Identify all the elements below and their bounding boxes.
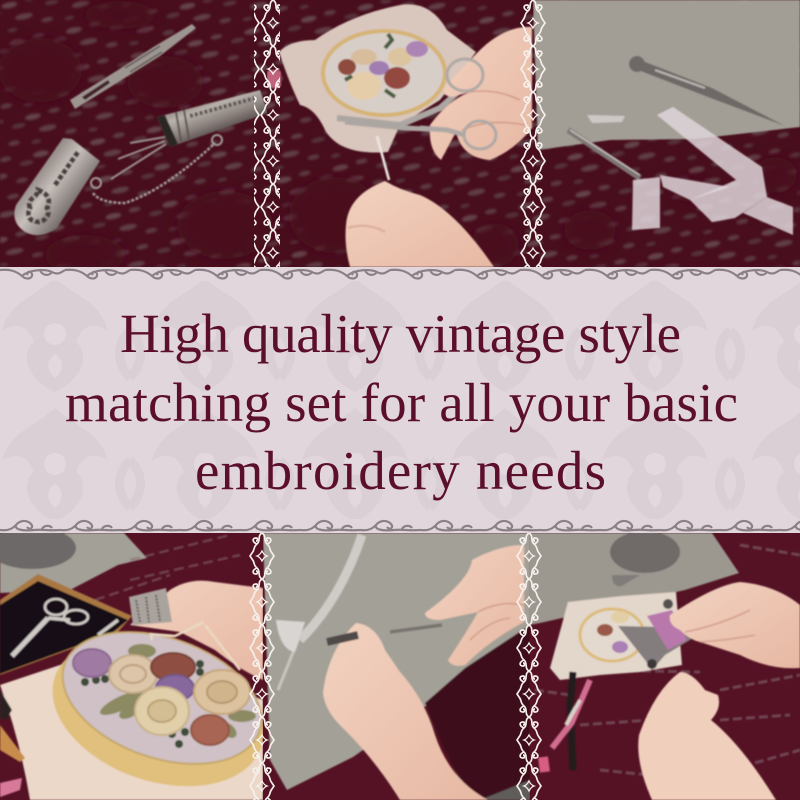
photo: hand holding awl bbox=[263, 533, 530, 800]
lace divider: top right bbox=[520, 0, 546, 267]
photo: stitching hoop with thimble bbox=[0, 527, 284, 800]
icon: silver floss card bbox=[618, 599, 702, 670]
icon: right hand bbox=[430, 27, 532, 160]
icon: organza ribbon strand bbox=[276, 535, 362, 690]
banner panel bbox=[0, 267, 800, 533]
photo: awl and ribbon on cloth bbox=[533, 0, 800, 235]
icon: upper hand bbox=[670, 582, 800, 668]
icon: dark green knots bbox=[81, 660, 204, 748]
icon: upper finger lines bbox=[685, 610, 755, 642]
photo: winding floss on card bbox=[529, 531, 800, 800]
headline line 2: matching set for all your basic bbox=[65, 372, 738, 433]
icon: large embroidery hoop bbox=[52, 621, 263, 787]
icon: needle tube bbox=[157, 90, 268, 147]
icon: cream fabric bbox=[0, 664, 263, 800]
icon: grey corner bbox=[480, 780, 530, 800]
lace divider: top left bbox=[254, 0, 280, 267]
icon: pink tag bbox=[267, 70, 281, 88]
icon: wooden scissor box bbox=[0, 574, 132, 675]
icon: finger lines bbox=[462, 91, 525, 130]
icon: grey cloth bbox=[263, 533, 530, 790]
headline line 1: High quality vintage style bbox=[120, 303, 681, 364]
icon: hand with thimble bbox=[129, 581, 263, 680]
icon: leaves bbox=[97, 644, 256, 741]
icon: thread bbox=[151, 622, 240, 670]
icon: supporting hand bbox=[425, 545, 524, 666]
icon: awl on linen bbox=[629, 56, 785, 126]
icon: grey yarn and cloth bbox=[0, 527, 147, 593]
icon: lower hand bbox=[638, 672, 776, 800]
icon: supporting finger lines bbox=[470, 604, 524, 640]
photo: needle case and needle minder set bbox=[14, 24, 268, 235]
icon: seam ripper bbox=[70, 24, 196, 109]
icon: vintage scissors bbox=[12, 599, 118, 656]
icon: second awl bbox=[568, 130, 640, 178]
icon: needles bbox=[111, 137, 166, 179]
icon: chain bbox=[91, 135, 222, 203]
icon: dark shadow cloth bbox=[425, 625, 530, 800]
icon: embroidery hoop bbox=[323, 31, 445, 115]
icon: lace streaks bbox=[95, 535, 240, 600]
icon: ribbon scrap bbox=[587, 115, 625, 123]
icon: scissor rings bbox=[420, 59, 496, 149]
icon: silver cap bbox=[14, 138, 100, 235]
icon: grey linen bbox=[529, 533, 739, 625]
icon: hand with awl bbox=[323, 623, 488, 800]
icon: left table clutter bbox=[0, 690, 25, 797]
banner top scroll border bbox=[0, 267, 800, 282]
headline bbox=[65, 303, 738, 501]
icon: organza ribbon bbox=[632, 107, 793, 235]
icon: grey linen bbox=[533, 0, 800, 150]
lace divider: bottom right bbox=[516, 533, 542, 800]
icon: lace streaks on table bbox=[535, 545, 800, 775]
icon: grey yarn ball bbox=[610, 531, 680, 586]
headline line 3: embroidery needs bbox=[195, 440, 606, 501]
photo: threading needle over hoop bbox=[267, 4, 532, 267]
lace divider: bottom left bbox=[249, 533, 275, 800]
damask pattern bbox=[0, 281, 800, 519]
icon: lower finger line bbox=[348, 226, 385, 232]
icon: fabric square bbox=[279, 4, 476, 153]
icon: floss skeins bbox=[543, 672, 590, 772]
icon: lower hand bbox=[346, 181, 494, 267]
icon: embroidery scissors bbox=[337, 92, 458, 130]
banner bottom scroll border bbox=[0, 518, 800, 533]
icon: needle bbox=[377, 136, 389, 180]
icon: fabric with mini hoop bbox=[550, 592, 682, 680]
icon: silk ribbon roses bbox=[73, 649, 250, 745]
